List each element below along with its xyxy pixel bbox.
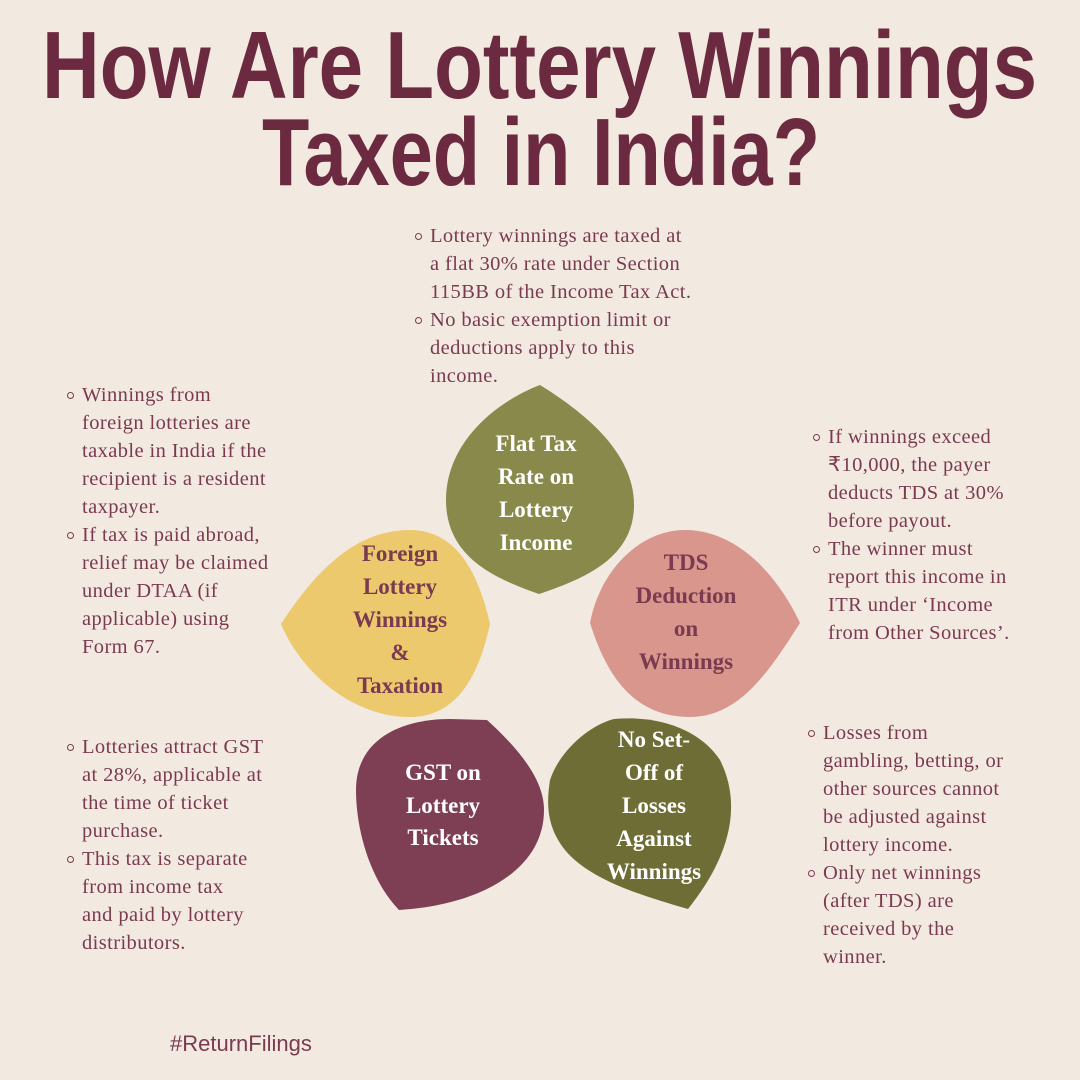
petal: foreign: Taxation — [357, 673, 443, 698]
text block: foreign: under DTAA (if — [82, 580, 218, 602]
text block: flat tax — [415, 225, 691, 387]
petal: no set-off: Winnings — [607, 859, 701, 884]
text block: foreign: applicable) using — [82, 608, 229, 630]
petal: TDS: Winnings — [639, 649, 733, 674]
petal: no set-off: Off of — [625, 760, 683, 785]
text block: foreign: recipient is a resident — [82, 468, 266, 490]
text block: foreign: If tax is paid abroad, — [82, 524, 260, 546]
text block: foreign: Form 67. — [82, 636, 160, 658]
text block: flat tax: income. — [430, 365, 498, 387]
petal: no set-off — [548, 718, 731, 909]
text block: foreign: Winnings from — [82, 384, 211, 406]
text block: no set-off: winner. — [823, 946, 887, 968]
text block: no set-off: be adjusted against — [823, 806, 987, 828]
text block: GST: Lotteries attract GST — [82, 736, 263, 758]
petal: foreign: Winnings — [353, 607, 447, 632]
text block: GST: at 28%, applicable at — [82, 764, 262, 786]
text block: no set-off: gambling, betting, or — [823, 750, 1003, 772]
text block: foreign: taxpayer. — [82, 496, 160, 518]
petal: no set-off: Against — [616, 826, 692, 851]
text block: flat tax: 115BB of the Income Tax Act. — [430, 281, 691, 303]
text block: foreign — [67, 384, 269, 658]
petal: GST: Tickets — [407, 825, 479, 850]
petal: flat tax: Lottery — [499, 497, 574, 522]
text block: TDS — [813, 426, 1010, 644]
text block: no set-off: other sources cannot — [823, 778, 1000, 800]
petal: TDS: Deduction — [636, 583, 737, 608]
petal: foreign: & — [390, 640, 410, 665]
text block: no set-off: received by the — [823, 918, 954, 940]
petal: GST: Lottery — [406, 793, 481, 818]
petal: foreign: Lottery — [363, 574, 438, 599]
text block: TDS: The winner must — [828, 538, 973, 560]
petal: flat tax — [446, 385, 634, 594]
petal: foreign — [281, 530, 490, 717]
text block: TDS: ITR under ‘Income — [828, 594, 993, 616]
text block: flat tax: deductions apply to this — [430, 337, 635, 359]
text block: flat tax: No basic exemption limit or — [430, 309, 671, 331]
text block: foreign: taxable in India if the — [82, 440, 267, 462]
text block: GST: from income tax — [82, 876, 223, 898]
text block: GST: purchase. — [82, 820, 164, 842]
text block: TDS: from Other Sources’. — [828, 622, 1010, 644]
petal: TDS: on — [674, 616, 698, 641]
petal: GST: GST on — [405, 760, 481, 785]
text block: no set-off: Losses from — [823, 722, 928, 744]
petal: GST — [356, 719, 544, 910]
petal: no set-off: No Set- — [618, 727, 690, 752]
petal: flat tax: Income — [500, 530, 572, 555]
petal: foreign: Foreign — [362, 541, 438, 566]
text block: TDS: ₹10,000, the payer — [828, 454, 991, 476]
text block: TDS: deducts TDS at 30% — [828, 482, 1004, 504]
text block: no set-off: lottery income. — [823, 834, 953, 856]
text block: flat tax: a flat 30% rate under Section — [430, 253, 680, 275]
title — [42, 12, 1037, 200]
text block: GST: the time of ticket — [82, 792, 229, 814]
text block: GST — [67, 736, 263, 954]
text block: no set-off — [808, 722, 1003, 968]
petal: flat tax: Flat Tax — [495, 431, 577, 456]
text block: no set-off: (after TDS) are — [823, 890, 954, 912]
text block: TDS: report this income in — [828, 566, 1007, 588]
petal: TDS — [590, 530, 800, 717]
petal: flat tax: Rate on — [498, 464, 574, 489]
text block: GST: and paid by lottery — [82, 904, 244, 926]
hashtag: #ReturnFilings — [170, 1031, 312, 1056]
text block: foreign: foreign lotteries are — [82, 412, 251, 434]
text block: foreign: relief may be claimed — [82, 552, 269, 574]
petal: no set-off: Losses — [622, 793, 686, 818]
text block: flat tax: Lottery winnings are taxed at — [430, 225, 682, 247]
text block: no set-off: Only net winnings — [823, 862, 981, 884]
text block: TDS: before payout. — [828, 510, 952, 532]
text block: GST: This tax is separate — [82, 848, 248, 870]
text block: TDS: If winnings exceed — [828, 426, 991, 448]
text block: GST: distributors. — [82, 932, 186, 954]
petal: TDS: TDS — [664, 550, 708, 575]
